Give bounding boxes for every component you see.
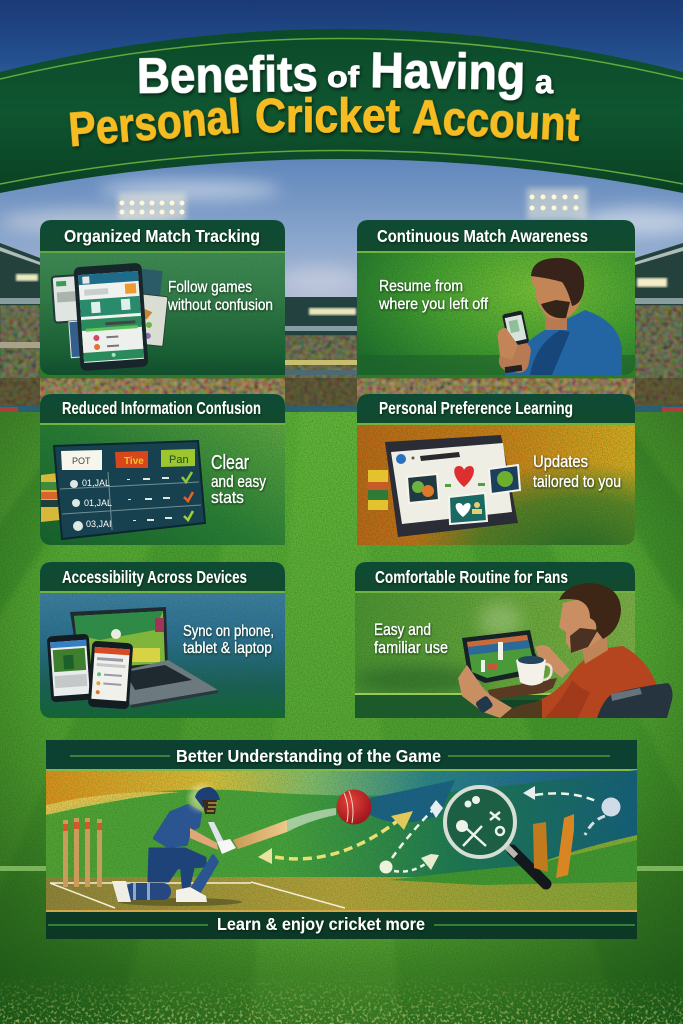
right arm bbox=[535, 645, 570, 678]
icon: devices bbox=[47, 607, 218, 709]
icon: stats dashboard: Tive bbox=[124, 456, 144, 467]
heading: Personal Preference Learning bbox=[379, 398, 573, 418]
helmet bbox=[189, 785, 215, 811]
title line 1: Having bbox=[370, 42, 526, 101]
icon: stats dashboard: 01,JAL bbox=[82, 478, 110, 488]
caption: Updates bbox=[533, 452, 588, 471]
icon: stats dashboard: 01,JAL bbox=[84, 498, 112, 508]
trajectory markers bbox=[258, 786, 620, 874]
icon: tablet with preferences bbox=[368, 435, 520, 537]
chair bbox=[597, 683, 672, 718]
watch bbox=[475, 695, 494, 714]
caption bbox=[183, 623, 274, 657]
caption bbox=[533, 452, 621, 491]
magnifying glass bbox=[445, 787, 546, 884]
caption: where you left off bbox=[378, 296, 488, 313]
heading: Continuous Match Awareness bbox=[377, 226, 588, 246]
ball bbox=[336, 790, 372, 824]
caption: Clear bbox=[211, 452, 249, 474]
heading: Reduced Information Confusion bbox=[62, 398, 261, 418]
footer bar: Learn & enjoy cricket more bbox=[217, 914, 425, 934]
panel: accessibility across devices bbox=[40, 562, 285, 718]
person with phone bbox=[497, 258, 622, 375]
heading: Organized Match Tracking bbox=[64, 226, 260, 246]
panel: continuous match awareness bbox=[357, 220, 635, 375]
cricket field bbox=[0, 412, 683, 1024]
phone right bbox=[88, 641, 133, 709]
title line 1 bbox=[136, 42, 554, 104]
icon: stats dashboard: POT bbox=[72, 456, 91, 466]
caption: stats bbox=[211, 488, 244, 507]
icon: phones bbox=[52, 263, 171, 371]
title line 2: Cricket bbox=[255, 90, 400, 143]
illustration bbox=[46, 770, 640, 910]
title line 1: Benefits bbox=[136, 46, 318, 104]
torso bbox=[155, 806, 200, 846]
footer bar bbox=[46, 910, 637, 939]
person with tablet and coffee bbox=[458, 583, 672, 718]
caption: familiar use bbox=[374, 638, 448, 657]
table bbox=[488, 678, 557, 700]
neck and head bbox=[580, 632, 608, 664]
title line 1: of bbox=[327, 61, 360, 94]
title line 1: a bbox=[535, 63, 554, 100]
caption bbox=[167, 279, 273, 314]
caption bbox=[378, 278, 488, 313]
title banner bbox=[0, 29, 683, 193]
laptop bbox=[70, 607, 218, 708]
title line 2: Personal bbox=[67, 90, 242, 157]
batter bbox=[112, 785, 336, 906]
header bar: Better Understanding of the Game bbox=[176, 746, 441, 766]
title line 2: Account bbox=[412, 91, 581, 152]
caption: Follow games bbox=[168, 279, 252, 296]
left hand and forearm bbox=[458, 665, 512, 718]
caption: without confusion bbox=[167, 297, 273, 314]
coffee cup bbox=[516, 656, 551, 686]
shirt bbox=[500, 646, 657, 718]
broken stumps bbox=[533, 814, 574, 878]
panel: personal preference learning bbox=[357, 394, 635, 545]
caption: tailored to you bbox=[533, 472, 621, 491]
caption bbox=[211, 452, 266, 507]
caption: Easy and bbox=[374, 620, 431, 639]
stumps bbox=[63, 818, 102, 887]
banner trim lines bbox=[0, 38, 683, 184]
phone left bbox=[47, 634, 93, 702]
panel: comfortable routine for fans bbox=[355, 562, 672, 718]
icon: stats dashboard: 03,JAI bbox=[86, 519, 112, 529]
icon: stats dashboard: Pan bbox=[169, 454, 189, 466]
legs bbox=[149, 849, 205, 881]
tablet bbox=[462, 630, 545, 683]
heading: Accessibility Across Devices bbox=[62, 567, 247, 587]
caption: tablet & laptop bbox=[183, 640, 272, 657]
heading: Comfortable Routine for Fans bbox=[375, 567, 568, 587]
title line 2 bbox=[67, 90, 581, 157]
arm, bat and gloves bbox=[190, 828, 218, 850]
panel: better understanding of the game bbox=[46, 740, 640, 939]
caption: Sync on phone, bbox=[183, 623, 274, 640]
panel: reduced information confusion bbox=[40, 394, 285, 545]
caption bbox=[374, 620, 448, 657]
header bar bbox=[46, 740, 637, 771]
background: sky and stadium bbox=[0, 0, 683, 413]
trajectory arrows bbox=[275, 793, 605, 872]
banner shape bbox=[0, 29, 683, 193]
floodlights bbox=[118, 188, 587, 220]
panel: organized match tracking bbox=[40, 220, 285, 375]
caption: and easy bbox=[211, 472, 266, 491]
caption: Resume from bbox=[379, 278, 463, 295]
icon: stats dashboard bbox=[41, 441, 205, 539]
